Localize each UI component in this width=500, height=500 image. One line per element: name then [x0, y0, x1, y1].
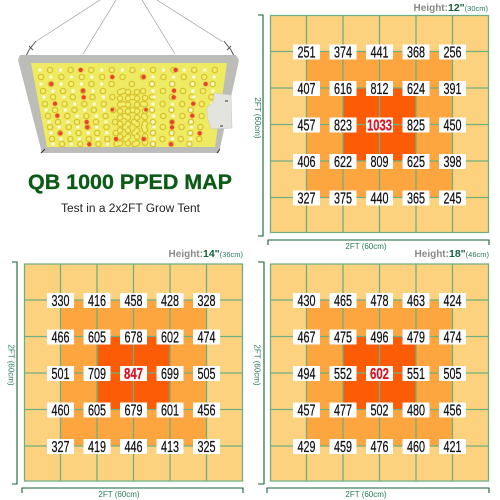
metal frame	[18, 55, 239, 153]
value labels: 398	[444, 154, 462, 171]
value labels: 460	[52, 402, 70, 420]
value labels: 505	[198, 366, 216, 383]
subtitle: Test in a 2x2FT Grow Tent	[61, 203, 201, 215]
bottom dimension bracket	[22, 488, 243, 493]
value labels: 368	[407, 44, 425, 62]
corner clips	[41, 149, 220, 153]
value labels: 416	[88, 293, 106, 310]
value labels: 413	[161, 439, 179, 456]
value labels: 325	[198, 439, 216, 456]
value labels: 823	[334, 118, 352, 134]
value labels	[293, 44, 466, 208]
value labels: 440	[370, 190, 389, 208]
bottom dimension label: 2FT (60cm)	[345, 490, 387, 499]
value labels: 601	[161, 402, 179, 420]
left dimension label: 2FT (60cm)	[6, 344, 16, 386]
value labels: 616	[334, 81, 352, 98]
value labels: 699	[161, 366, 179, 383]
value labels: 430	[298, 293, 316, 310]
heat zones	[270, 15, 489, 233]
value labels: 476	[370, 439, 389, 456]
hanging wires	[35, 0, 223, 54]
value labels: 466	[52, 330, 70, 346]
hanger clips	[24, 41, 236, 60]
value labels: 812	[370, 81, 389, 98]
value labels: 256	[444, 44, 462, 62]
value labels: 251	[298, 44, 316, 62]
value labels: 477	[334, 402, 352, 420]
value labels: 501	[52, 366, 70, 383]
value labels: 602	[370, 366, 389, 383]
value labels	[293, 293, 466, 456]
value labels: 421	[444, 439, 462, 456]
value labels: 622	[334, 154, 352, 171]
value labels: 551	[407, 366, 425, 383]
yellow LED board	[31, 63, 227, 147]
value labels: 605	[88, 402, 106, 420]
value labels: 457	[298, 402, 316, 420]
grid lines	[270, 15, 489, 233]
value labels: 1033	[367, 118, 392, 134]
height label: Height:14"(36cm)	[169, 248, 243, 260]
value labels: 809	[370, 154, 389, 171]
value labels: 825	[407, 118, 425, 134]
value labels: 327	[52, 439, 70, 456]
value labels: 407	[298, 81, 316, 98]
value labels: 456	[198, 402, 216, 420]
value labels: 624	[407, 81, 425, 98]
value labels: 375	[334, 190, 352, 208]
left dimension bracket	[258, 15, 263, 236]
value labels: 479	[407, 330, 425, 346]
left dimension label: 2FT (60cm)	[252, 344, 262, 386]
value labels: 429	[298, 439, 316, 456]
value labels: 679	[124, 402, 143, 420]
value labels: 467	[298, 330, 316, 346]
value labels	[47, 293, 220, 456]
left dimension label: 2FT (60cm)	[253, 97, 262, 139]
bottom dimension label: 2FT (60cm)	[345, 242, 387, 251]
LED rows	[40, 70, 222, 146]
heat zones	[270, 264, 489, 482]
value labels: 465	[334, 293, 352, 310]
value labels: 406	[298, 154, 316, 171]
value labels: 474	[444, 330, 462, 346]
value labels: 365	[407, 190, 425, 208]
value labels: 459	[334, 439, 352, 456]
value labels: 330	[52, 293, 70, 310]
value labels: 424	[444, 293, 462, 310]
height label: Height:18"(46cm)	[415, 248, 489, 260]
value labels: 625	[407, 154, 425, 171]
left dimension bracket	[258, 262, 264, 484]
value labels: 460	[407, 439, 425, 456]
value labels: 502	[370, 402, 389, 420]
value labels: 428	[161, 293, 179, 310]
value labels: 391	[444, 81, 462, 98]
value labels: 678	[124, 330, 143, 346]
grid lines	[270, 264, 489, 482]
panel: 12 inch height map	[253, 2, 489, 251]
value labels: 496	[370, 330, 389, 346]
value labels: 458	[124, 293, 143, 310]
value labels: 480	[407, 402, 425, 420]
red LEDs	[49, 68, 208, 147]
value labels: 463	[407, 293, 425, 310]
heat grid	[270, 15, 489, 233]
value labels: 552	[334, 366, 352, 383]
value labels: 245	[444, 190, 462, 208]
value labels: 505	[444, 366, 462, 383]
value labels: 419	[88, 439, 106, 456]
value labels: 478	[370, 293, 389, 310]
heat grid	[270, 264, 489, 482]
value labels: 475	[334, 330, 352, 346]
left dimension bracket	[12, 262, 17, 484]
bottom dimension bracket	[268, 240, 489, 245]
value labels: 441	[370, 44, 389, 62]
value labels: 602	[161, 330, 179, 346]
value labels: 374	[334, 44, 352, 62]
value labels: 494	[298, 366, 316, 383]
bottom dimension label: 2FT (60cm)	[98, 490, 140, 499]
value labels: 474	[198, 330, 216, 346]
driver box	[207, 93, 232, 129]
heat grid	[24, 264, 243, 482]
value labels: 450	[444, 118, 462, 134]
value labels: 328	[198, 293, 216, 310]
bottom dimension bracket	[267, 488, 489, 493]
value labels: 847	[124, 366, 143, 383]
value labels: 605	[88, 330, 106, 346]
value labels: 456	[444, 402, 462, 420]
value labels: 327	[298, 190, 316, 208]
icon: LED grow light panel	[18, 0, 239, 153]
grid lines	[24, 264, 243, 482]
value labels: 446	[124, 439, 143, 456]
height label: Height:12"(30cm)	[414, 2, 488, 14]
title: QB 1000 PPED MAP	[28, 170, 232, 194]
panel: 18 inch height map	[252, 248, 489, 499]
value labels: 457	[298, 118, 316, 134]
panel: 14 inch height map	[6, 248, 243, 499]
value labels: 709	[88, 366, 106, 383]
heat zones	[24, 264, 243, 482]
